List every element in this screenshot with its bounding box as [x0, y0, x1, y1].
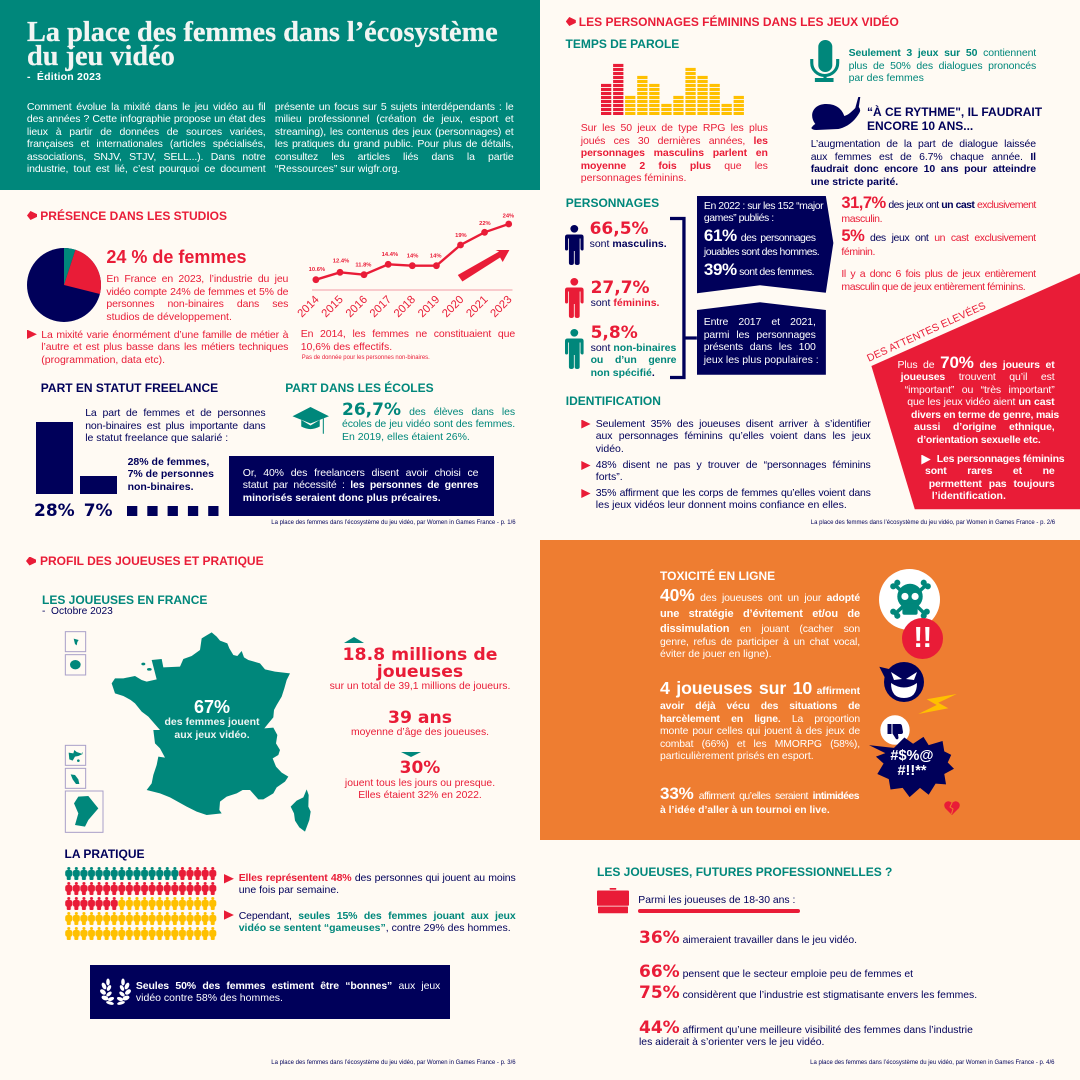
callout text — [243, 466, 478, 504]
RPG text — [580, 122, 768, 184]
stat: non-binary — [591, 323, 676, 379]
panel: profil des joueuses — [26, 554, 516, 1066]
map shapes — [20, 580, 320, 840]
intro text column 1: des années ? Cette infographie propose un état des — [27, 113, 266, 125]
line chart: 2019 — [416, 294, 442, 320]
callout text: parmi les personnages — [704, 329, 816, 341]
footer: La place des femmes dans l’écosystème du jeu vidéo, par Women in Games France - p. 3/6 — [271, 1060, 516, 1066]
pie chart — [27, 248, 101, 322]
age value: 39 ans — [388, 708, 452, 728]
red shape — [865, 270, 1080, 510]
icon: snail — [811, 97, 860, 130]
edition label: - Édition 2023 — [27, 71, 101, 83]
stat: 40%: dissimulation en jouant (cacher son — [660, 623, 860, 635]
callout text: 39% sont des femmes. — [704, 260, 814, 279]
expectations text: Plus de 70% des joueurs et — [898, 353, 1055, 372]
value: joueuses — [377, 662, 463, 682]
rare characters text: l’identification. — [932, 490, 1006, 502]
callout text: minorisés seraient donc plus précaires. — [243, 492, 441, 504]
intro text column 2: les pratiques du grand public. Pour plus de détails, — [275, 138, 514, 150]
stat: 4 joueuses sur 10: combat (66%) et les MMORPG (58%), — [660, 739, 860, 750]
icon: swearing burst — [869, 736, 954, 798]
daily value: 30% — [400, 758, 440, 778]
intro text column 1: industrie, tout est lié, c’est pourquoi ce document — [27, 163, 266, 175]
panel: header — [0, 0, 540, 190]
value: 18.8 millions de — [343, 645, 497, 665]
callout: top 100 games — [697, 302, 826, 375]
stat: 66%: 66% pensent que le secteur emploie peu de femmes et — [639, 962, 913, 982]
caption: sont masculins. — [590, 238, 667, 250]
panel: présence dans les studios: 24% — [503, 213, 514, 219]
caption: ou d’un genre — [591, 354, 676, 366]
footer: La place des femmes dans l’écosystème du jeu vidéo, par Women in Games France - p. 4/6 — [810, 1060, 1054, 1066]
icon: exclamation badge: !! — [913, 622, 932, 654]
line chart: 2014 — [295, 294, 322, 320]
weekly text — [239, 872, 516, 896]
freelance text: non-binaires est plus importante dans — [85, 420, 265, 432]
line chart: 14% — [407, 254, 418, 260]
callout: precarity — [229, 456, 494, 516]
identification bullets — [581, 418, 871, 511]
value: 66,5% — [590, 218, 649, 238]
daily caption — [320, 778, 520, 802]
RPG text: Sur les 50 jeux de type RPG les plus — [581, 122, 768, 134]
bullet text 1: vidéo. — [596, 443, 624, 455]
freelance text: le statut freelance que salarié : — [85, 432, 228, 444]
arrow bullet 1 — [581, 420, 591, 428]
panel: présence dans les studios — [27, 208, 516, 526]
icon: female figure — [565, 278, 584, 318]
characters heading: PERSONNAGES — [566, 196, 659, 210]
bullet text 2: 48% disent ne pas y trouver de “personnages féminins — [596, 459, 871, 471]
arrow bullet — [921, 454, 931, 464]
freelance figures: 28% de femmes, — [128, 456, 209, 468]
arrow bullet — [224, 874, 234, 884]
stat text: En France en 2023, l’industrie du jeu — [106, 273, 288, 285]
callout text: Seules 50% des femmes estiment être “bonnes” aux jeux — [136, 980, 440, 992]
rare characters text — [865, 453, 1055, 503]
rare characters text: Les personnages féminins — [937, 453, 1064, 465]
stat: 33%: 33% affirment qu’elles seraient intimidées — [660, 784, 859, 802]
non-binary squares — [127, 506, 218, 516]
freelance figures — [128, 456, 214, 493]
icon: briefcase — [597, 888, 629, 914]
stat: 44%: 44% affirment qu’une meilleure visibilité des femmes dans l’industrie — [639, 1018, 973, 1038]
down arrow — [401, 752, 421, 757]
rhythm text: L’augmentation de la part de dialogue laissée — [811, 138, 1036, 150]
bracket connector — [670, 216, 697, 380]
rare characters text: permettent pas toujours — [929, 478, 1055, 490]
intro text column 1 — [27, 101, 266, 175]
line chart: 12.4% — [333, 259, 349, 265]
rotated heading: DES ATTENTES ELEVÉES — [865, 301, 987, 365]
panel: toxicité en ligne — [540, 540, 1080, 840]
job family text: La mixité varie énormément d’une famille de métier à — [41, 329, 288, 341]
stat text — [106, 273, 288, 322]
caption: sur un total de 39,1 millions de joueurs. — [330, 680, 510, 692]
burst symbols — [881, 749, 943, 779]
line chart: 2017 — [368, 294, 394, 320]
value: 5,8% — [591, 323, 638, 343]
callout text: statut par nécessité : les personnes de genres — [243, 479, 478, 491]
schools text: écoles de jeu vidéo sont des femmes. — [342, 418, 515, 430]
stat heading: 24 % de femmes — [106, 247, 246, 267]
weekly text: une fois par semaine. — [239, 884, 339, 896]
icon: non-binary figure — [565, 329, 584, 369]
callout text — [136, 980, 440, 1004]
intro text column 2: streaming), les contenus des jeux (personnages) et — [275, 126, 514, 138]
burst shape — [869, 736, 954, 798]
icon: lightning — [918, 694, 957, 715]
intro text column 1: lieux à partir de données de sources variées, — [27, 126, 266, 138]
section bullet — [26, 556, 36, 566]
stat: 75%: 75% considèrent que l’industrie est stigmatisante envers les femmes. — [639, 982, 977, 1002]
job family text: l’autre et est plus basse dans les métiers techniques — [41, 341, 288, 353]
line chart — [295, 213, 515, 320]
map of France — [20, 580, 320, 840]
cast statistics: masculin que de jeux entièrement féminins. — [841, 280, 1025, 292]
map stat text: aux jeux vidéo. — [174, 729, 250, 741]
line chart: 2018 — [392, 294, 418, 320]
job family text: (programmation, data etc). — [41, 354, 165, 366]
expectations text: d’orientation sexuelle etc. — [917, 434, 1041, 446]
callout: major games — [697, 196, 834, 294]
icon: broken heart — [944, 800, 960, 814]
dialogues text — [849, 47, 1036, 84]
freelance bars — [34, 422, 218, 520]
stat: 44% — [639, 1018, 999, 1052]
subheading: LES JOUEUSES EN FRANCE — [42, 593, 207, 607]
caption: sont féminins. — [591, 296, 659, 308]
schools text: En 2019, elles étaient 26%. — [342, 430, 470, 442]
rhythm text — [810, 138, 1036, 188]
practice heading: LA PRATIQUE — [64, 846, 144, 860]
line chart: 22% — [479, 221, 491, 227]
label 7%: 7% — [84, 500, 113, 520]
stat: 40%: une stratégie d’évitement et/ou de — [660, 608, 860, 620]
label 28%: 28% — [34, 500, 75, 520]
stat: 4 joueuses sur 10: particulièrement prisés en esport. — [660, 751, 814, 762]
callout text: présents dans les 100 — [704, 341, 816, 353]
freelance figures: 7% de personnes — [128, 468, 214, 480]
icon: male figure — [565, 225, 584, 265]
bullet text 1: Seulement 35% des joueuses disent arriver à s’identifier — [596, 418, 871, 430]
line chart: 19% — [455, 233, 467, 239]
intro line: Parmi les joueuses de 18-30 ans : — [638, 894, 795, 906]
small note: Pas de donnée pour les personnes non-binaires. — [302, 355, 430, 361]
callout text: Entre 2017 et 2021, — [704, 316, 816, 328]
2014 text — [301, 328, 515, 353]
rhythm text: faudrait donc encore 10 ans pour atteindre — [811, 163, 1036, 175]
expectations text: aussi d’origine ethnique, — [914, 421, 1055, 433]
stat: 4 joueuses sur 10: avoir déjà vécu des situations de — [660, 701, 860, 712]
stat: feminine — [591, 278, 659, 308]
callout shape — [697, 196, 834, 294]
intro text column 1: françaises et internationales (articles spécialisés, — [27, 138, 266, 150]
icon: thumb down — [880, 715, 910, 745]
callout shape — [697, 302, 826, 375]
rhythm heading — [867, 104, 1042, 133]
caption: non spécifié. — [591, 367, 655, 379]
cast statistics: 31,7% des jeux ont un cast exclusivement — [841, 194, 1036, 212]
callout text: 61% des personnages — [704, 226, 815, 245]
callout text: jouables sont des hommes. — [704, 246, 819, 258]
section heading: LES PERSONNAGES FÉMININS DANS LES JEUX VIDÉO — [579, 14, 899, 28]
rhythm heading: “À CE RYTHME", IL FAUDRAIT — [867, 104, 1042, 118]
dialogues text: plus de 50% des dialogues prononcés — [849, 60, 1036, 72]
freelance heading: PART EN STATUT FREELANCE — [41, 381, 218, 395]
rhythm heading: ENCORE 10 ANS... — [867, 119, 973, 133]
line chart: 2021 — [464, 294, 491, 320]
expectations text: divers en terme de genre, mais — [911, 409, 1059, 421]
stat: 33%: à l’idée d’aller à un tournoi en live. — [660, 804, 830, 816]
footer: La place des femmes dans l’écosystème du jeu vidéo, par Women in Games France - p. 1/6 — [271, 520, 516, 526]
panel: futures professionnelles — [540, 840, 1080, 1080]
icon: exclamation badge — [902, 618, 943, 658]
cast statistics — [841, 194, 1036, 292]
daily caption: jouent tous les jours ou presque. — [345, 778, 495, 788]
RPG text: personnages masculins parlent en — [581, 147, 768, 159]
2014 text: En 2014, les femmes ne constituaient que — [301, 328, 515, 340]
gamer text: Cependant, seules 15% des femmes jouant aux jeux — [239, 910, 516, 922]
title — [27, 16, 498, 72]
daily caption: Elles étaient 32% en 2022. — [358, 790, 482, 801]
identification heading: IDENTIFICATION — [566, 394, 661, 408]
dialogues text: par des femmes — [849, 72, 924, 84]
panel: personnages féminins — [565, 14, 1080, 526]
line chart: 2020 — [440, 294, 466, 320]
stat text: vidéo compte 24% de femmes et 5% de — [106, 286, 288, 298]
stat: 4 joueuses sur 10: 4 joueuses sur 10 affirment — [660, 678, 860, 698]
bullet text 2: forts”. — [596, 471, 623, 483]
cast statistics: masculin. — [841, 212, 882, 224]
bar 28% — [36, 422, 73, 494]
intro text column 2: consultez les articles liés dans la partie — [275, 151, 514, 163]
burst symbols: #!!** — [897, 763, 926, 779]
bullet text 1 — [596, 418, 871, 455]
icon: laurel — [100, 978, 131, 1004]
schools heading: PART DANS LES ÉCOLES — [285, 381, 434, 395]
icon: microphone — [810, 40, 840, 82]
freelance text — [85, 407, 266, 444]
expectations text — [865, 359, 1055, 446]
stat text: personnes non-binaires dans ses — [106, 298, 288, 310]
line chart: 10.6% — [309, 267, 325, 273]
stat: 44%: les aiderait à s’orienter vers le jeu vidéo. — [639, 1036, 824, 1048]
section bullet — [566, 17, 576, 26]
dialogues text: Seulement 3 jeux sur 50 contiennent — [849, 47, 1036, 59]
stat: 36%: 36% aimeraient travailler dans le jeu vidéo. — [639, 928, 857, 948]
stat: 33% — [660, 790, 859, 817]
expectations text: que les jeux vidéo aient un cast — [907, 396, 1055, 408]
callout text: En 2022 : sur les 152 “major — [704, 200, 823, 212]
section heading: PRÉSENCE DANS LES STUDIOS — [40, 208, 227, 222]
pictogram grid — [65, 867, 216, 940]
map stat value: 67% — [194, 696, 230, 716]
rhythm text: une stricte parité. — [811, 176, 898, 188]
line chart: 14% — [430, 254, 442, 260]
line chart: 11.8% — [355, 262, 371, 268]
arrow bullet 2 — [581, 461, 591, 470]
intro text column 1: associations, SNJV, STJV, SELL...). Dans notre — [27, 151, 266, 163]
bullet text 3: les jeux vidéos leur donnent moins confiance en elles. — [596, 499, 847, 511]
section heading: PROFIL DES JOUEUSES ET PRATIQUE — [40, 554, 264, 568]
stat: 40% — [660, 593, 860, 662]
intro text column 2 — [275, 101, 514, 175]
icon: devil face — [879, 666, 925, 703]
stat: 40%: éviter de jouer en ligne). — [660, 649, 771, 660]
heading: LES JOUEUSES, FUTURES PROFESSIONNELLES ? — [597, 865, 892, 879]
intro text column 2: “Ressources” sur wigfr.org. — [275, 163, 400, 175]
intro text column 2: milieu professionnel (création de jeux, esport et — [275, 113, 514, 125]
bullet text 2 — [596, 459, 871, 484]
stat: 4 joueuses sur 10: monte pour celles qui jouent à des jeux de — [660, 726, 860, 737]
date: - Octobre 2023 — [42, 606, 113, 617]
callout text: Or, 40% des freelancers disent avoir choisi ce — [243, 466, 478, 478]
map stat text: des femmes jouent — [164, 716, 260, 728]
heading: TOXICITÉ EN LIGNE — [660, 569, 775, 583]
RPG text: personnages féminins. — [581, 172, 686, 184]
rare characters text: sont rares et ne — [925, 465, 1055, 477]
RPG text: joués ces 30 dernières années, les — [581, 135, 768, 147]
callout text: vidéo contre 58% des hommes. — [136, 992, 283, 1004]
intro text column 2: présente un focus sur 5 sujets interdépendants : le — [275, 101, 514, 113]
arrow bullet — [27, 330, 37, 339]
callout text — [704, 200, 824, 279]
stat: masculine — [590, 218, 667, 250]
rhythm text: aux femmes est de 6.7% chaque année. Il — [811, 151, 1036, 163]
cast statistics: féminin. — [841, 246, 875, 258]
callout text: games” publiés : — [704, 212, 774, 224]
callout text: jeux les plus populaires : — [704, 354, 819, 366]
weekly text: Elles représentent 48% des personnes qui jouent au moins — [239, 872, 516, 884]
bullet text 3: 35% affirment que les corps de femmes qu’elles voient dans — [596, 487, 871, 499]
value: 27,7% — [591, 278, 650, 298]
equalizer chart — [601, 64, 744, 115]
stat: 40%: genre, refus de participer à un chat vocal, — [660, 637, 860, 648]
title: La place des femmes dans l’écosystème — [27, 16, 498, 48]
expectations text: joueuses trouvent qu’il est — [901, 371, 1055, 383]
arrow bullet 3 — [581, 489, 591, 498]
caption — [591, 342, 676, 379]
burst symbols: #$%@ — [890, 748, 934, 764]
stat text: studios de développement. — [106, 310, 232, 322]
panel: expectations — [865, 273, 1080, 510]
line chart: 2015 — [320, 294, 346, 320]
line chart: 2016 — [344, 294, 370, 320]
bullet text 1: aux personnages féminins qu’elles voient dans les jeux — [596, 430, 871, 442]
cast statistics: Il y a donc 6 fois plus de jeux entièrement — [841, 268, 1036, 280]
caption: sont non-binaires — [591, 342, 676, 354]
value — [320, 647, 520, 681]
footer: La place des femmes dans l’écosystème du jeu vidéo, par Women in Games France - p. 2/6 — [811, 520, 1055, 526]
stat: 4 joueuses sur 10 — [660, 686, 860, 764]
arrow bullet — [224, 910, 234, 920]
red underline — [638, 909, 800, 913]
callout: skill — [90, 965, 450, 1019]
gamer text — [239, 910, 516, 934]
stat: players — [320, 635, 520, 793]
expectations text: “important” ou “très important” — [905, 384, 1055, 396]
speaking time heading: TEMPS DE PAROLE — [566, 37, 679, 51]
job family text — [41, 329, 288, 366]
icon: skull — [879, 569, 940, 630]
map stat text — [150, 716, 274, 742]
schools text: 26,7% des élèves dans les — [342, 400, 515, 420]
gamer text: vidéo se sentent “gameuses”, contre 29% des hommes. — [239, 922, 511, 934]
line chart: 14.4% — [382, 252, 398, 258]
cast statistics: 5% des jeux ont un cast exclusivement — [841, 227, 1036, 245]
section bullet — [27, 211, 37, 220]
age caption: moyenne d’âge des joueuses. — [351, 727, 489, 738]
bar 7% — [80, 476, 117, 494]
title: du jeu vidéo — [27, 40, 175, 72]
freelance text: La part de femmes et de personnes — [85, 407, 265, 419]
up arrow — [344, 637, 364, 643]
bullet text 3 — [596, 487, 871, 512]
RPG text: moyenne 2 fois plus que les — [581, 160, 768, 172]
freelance figures: non-binaires. — [128, 481, 194, 493]
line chart: 2023 — [488, 294, 515, 320]
intro text column 1: Comment évolue la mixité dans le jeu vidéo au fil — [27, 101, 266, 113]
callout text — [704, 316, 819, 366]
schools text — [342, 400, 515, 442]
2014 text: 10,6% des effectifs. — [301, 341, 392, 353]
icon: graduation cap — [292, 407, 329, 434]
stat: 4 joueuses sur 10: harcèlement en ligne. La proportion — [660, 714, 860, 725]
stat: 40%: 40% des joueuses ont un jour adopté — [660, 585, 860, 605]
